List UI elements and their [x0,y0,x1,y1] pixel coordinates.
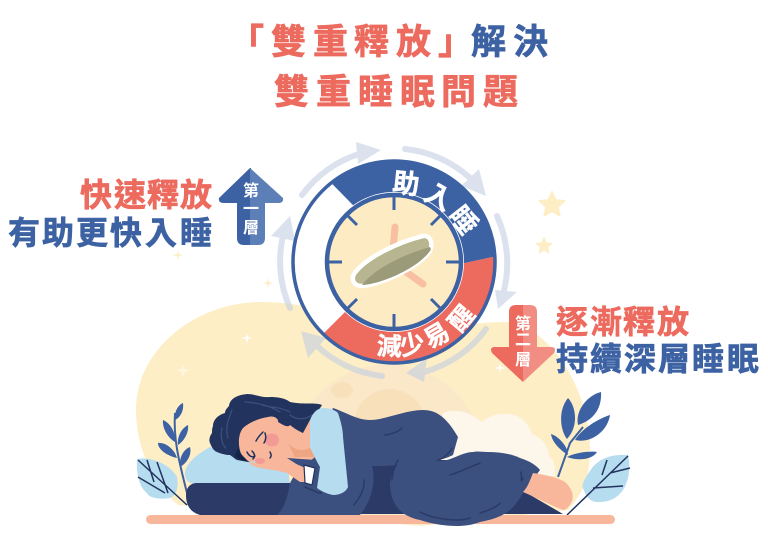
ring label: 減少易醒: 少 [397,329,427,361]
dark blanket under layer [277,452,563,514]
label: fast release: 有助更快入睡 [8,215,212,251]
ring label: 助入睡 [391,168,483,240]
title: 「雙重釋放」 [229,23,473,62]
arrow: first layer up: 一 [243,201,259,218]
arrow: first layer up [219,168,283,245]
cuff [304,465,315,485]
clock dial [293,161,495,363]
label: gradual release [556,304,759,377]
arrow: first layer up: 第 [243,181,259,200]
face and neck [239,416,315,465]
label: gradual release: 逐漸釋放 [556,304,689,340]
hair shadow [235,448,248,461]
right plant [551,392,630,515]
ring label: 減少易醒: 易 [419,318,455,354]
ring label: 減少易醒: 減 [376,333,402,361]
cheek [265,434,279,446]
ring label: 助入睡: 睡 [443,201,483,240]
label: fast release [8,177,212,251]
ring label: 助入睡: 入 [419,177,458,217]
ring segment: red [324,257,494,362]
sleeping woman [185,394,573,526]
hair strands [221,402,312,448]
circular arrows [271,142,517,382]
ring label: 減少易醒 [376,300,481,361]
mattress pillow base [186,483,295,515]
ring label: 助入睡: 助 [391,168,421,200]
neck shadow [288,443,315,457]
ring segment: blue [332,162,494,263]
arrow: second layer down [491,305,555,382]
arrow: second layer down: 第 [515,314,531,333]
title: 解決 [471,23,548,62]
clock hands [392,227,423,284]
pillow [185,447,290,484]
decorative stars [172,192,564,377]
floor line [146,515,615,524]
background blob [136,302,590,526]
sleeve [310,408,348,495]
title [229,23,548,112]
moon [293,364,483,515]
hair [209,394,322,462]
ring label: 減少易醒: 醒 [443,300,481,337]
arrow: second layer down: 二 [515,332,531,349]
label: fast release: 快速釋放 [80,177,212,213]
label: gradual release: 持續深層睡眠 [556,341,759,377]
blanket torso and hip [277,408,458,515]
blanket front leg [390,452,540,526]
blanket fold lines [305,428,523,520]
blanket collar [287,458,322,474]
arrow: second layer down: 層 [515,351,531,369]
arrow: first layer up: 層 [243,219,259,237]
cloud [440,411,555,480]
left plant [137,403,190,505]
closed eyes [247,432,271,459]
title: 雙重睡眠問題 [274,73,518,112]
foot [523,473,573,510]
hand blush [255,458,265,464]
seed [353,236,431,286]
arm under head [248,462,308,482]
